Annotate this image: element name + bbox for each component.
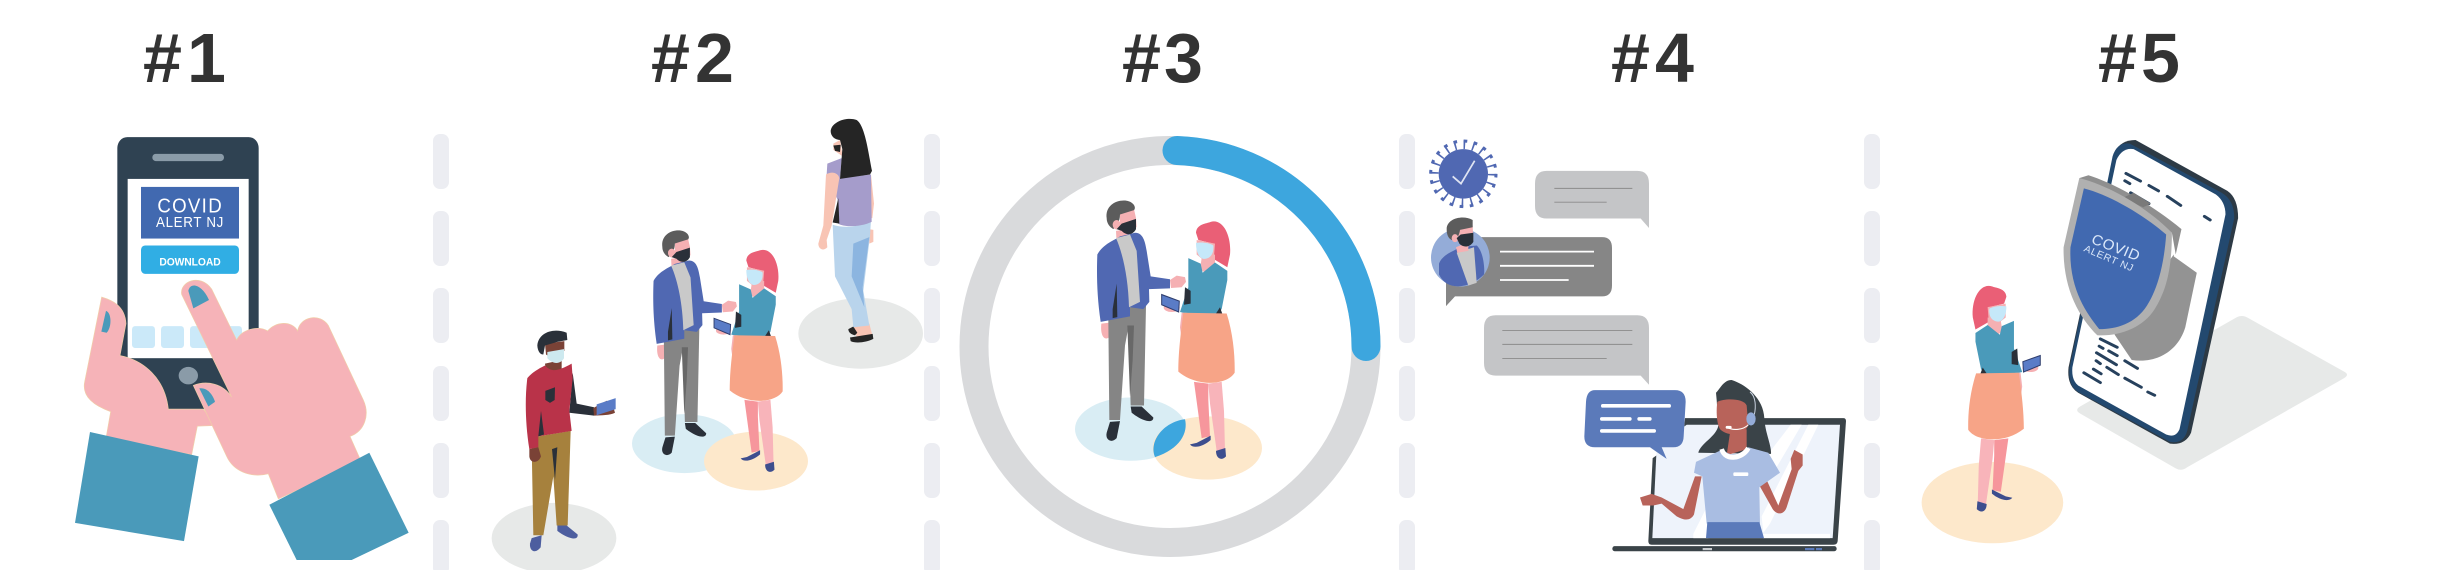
speech bubble: light 2 [1484, 315, 1649, 385]
floor shadow [2077, 316, 2347, 470]
dashed divider 1 [433, 134, 449, 570]
icon: right hand pressing download [181, 280, 409, 560]
dashed divider 4 [1864, 134, 1880, 570]
figure: woman with phone on circle [1922, 286, 2063, 543]
panel 5: phone protected by shield [1922, 140, 2347, 543]
heading: #1: #1 [143, 19, 226, 97]
heading: #2: #2 [651, 19, 734, 97]
panel 4: chat between user and agent [1431, 141, 1846, 551]
dashed divider 2 [924, 134, 940, 570]
icon: phone: ALERT NJ [156, 213, 223, 230]
icon: phone [117, 137, 259, 409]
icon: phone: COVID [157, 195, 222, 218]
icon: shield with COVID Alert NJ logo: ALERT NJ [2082, 244, 2135, 274]
icon: shield with COVID Alert NJ logo [2064, 175, 2197, 361]
heading: #4: #4 [1611, 19, 1694, 97]
speech bubble: dark with avatar [1446, 237, 1612, 306]
figure: woman with black hair on grey circle [798, 119, 923, 369]
avatar: masked man [1431, 217, 1490, 287]
icon: shield with COVID Alert NJ logo: COVID [2089, 231, 2142, 265]
figure: man in red sweater on grey circle [492, 331, 616, 570]
speech bubble: light 1 [1535, 171, 1649, 228]
panel 3: progress ring [974, 150, 1366, 542]
laptop with agent [1612, 380, 1846, 551]
panel 2: people keeping distance [492, 119, 923, 570]
dashed divider 3 [1399, 134, 1415, 570]
figure: man and woman close together [632, 230, 808, 491]
icon: left hand [75, 297, 217, 541]
icon: virus with checkmark [1431, 141, 1496, 207]
speech bubble: blue agent [1584, 390, 1686, 459]
panel 1: hands holding phone with download screen [75, 137, 409, 560]
heading: #3: #3 [1122, 19, 1203, 97]
icon: isometric phone [2068, 140, 2238, 444]
panel 3: man and woman inside ring with overlapping circles [1075, 201, 1262, 480]
heading: #5: #5 [2098, 19, 2180, 97]
icon: phone: DOWNLOAD [159, 256, 221, 269]
